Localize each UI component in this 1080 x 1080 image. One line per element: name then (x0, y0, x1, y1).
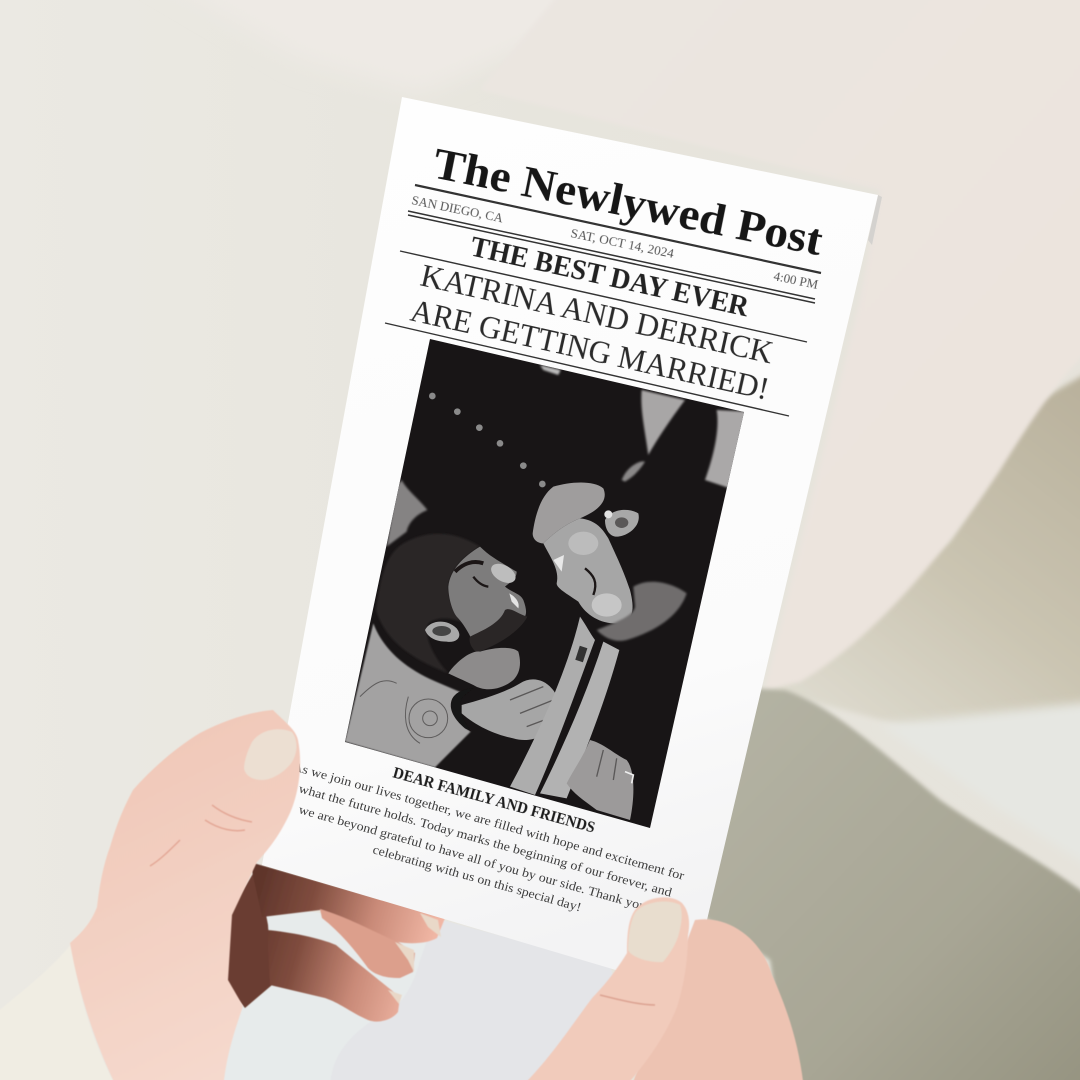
dateline: date: SAT, OCT 14, 2024 (569, 225, 676, 261)
letter body: celebrating with us on this special day! (371, 842, 583, 914)
fingernails (420, 913, 441, 937)
masthead rule (415, 185, 821, 273)
background: pale floor strip (215, 900, 445, 1080)
headline: getting married: ARE GETTING MARRIED! (407, 292, 773, 407)
dateline: time: 4:00 PM (772, 268, 820, 292)
top finger (250, 862, 445, 943)
photo: man's hair (376, 534, 480, 673)
photo: jacket stripes (510, 617, 619, 798)
rule above photo (385, 323, 789, 416)
icon: left thumbnail (244, 729, 296, 780)
dark web between palm and third finger (226, 867, 272, 1008)
letter body: As we join our lives together, we are filled with hope and excitement for (291, 759, 687, 883)
background: pale bedding at right (880, 700, 1080, 880)
photo: man's hand and watch (451, 679, 557, 740)
background: pillow (480, 0, 1080, 690)
photo: couple portrait (340, 330, 760, 840)
icon: right thumbnail (628, 902, 682, 962)
photo: embroidered cloth (345, 623, 471, 767)
left hand palm and thumb (70, 710, 300, 1080)
photo: woman's hand under chin (533, 482, 605, 543)
letter body: what the future holds. Today marks the beginning of our forever, and (297, 781, 674, 900)
middle finger (320, 909, 415, 978)
photo: light backdrop patches (387, 365, 747, 547)
right hand and thumb (518, 897, 804, 1080)
photo: jacket buttons (429, 393, 546, 487)
photo: man's face (425, 547, 527, 689)
thumb knuckle creases (150, 805, 252, 866)
background: shadow under pillow (770, 360, 1080, 735)
headline: couple names: KATRINA AND DERRICK (417, 257, 777, 370)
background: white trouser leg (330, 918, 620, 1080)
left hand fingers behind card (226, 862, 445, 1022)
dateline: location: SAN DIEGO, CA (410, 192, 505, 226)
letter heading: DEAR FAMILY AND FRIENDS (391, 764, 597, 837)
thumb knuckle crease (600, 995, 655, 1005)
letter body: we are beyond grateful to have all of you by our side. Thank you for (297, 802, 668, 919)
sweater sleeve (0, 943, 118, 1080)
background: grey trousers (700, 688, 1080, 1080)
photo: woman's face (543, 510, 639, 624)
headline: the best day ever: THE BEST DAY EVER (467, 231, 753, 324)
double rule (408, 211, 815, 303)
photo: woman's hair highlight (597, 582, 687, 641)
letter body (291, 759, 687, 919)
third finger (267, 930, 400, 1022)
photo: hand with ring (567, 740, 633, 820)
rule under headline (400, 251, 807, 342)
newspaper card (262, 97, 882, 992)
masthead: The Newlywed Post: The Newlywed Post (429, 139, 827, 265)
